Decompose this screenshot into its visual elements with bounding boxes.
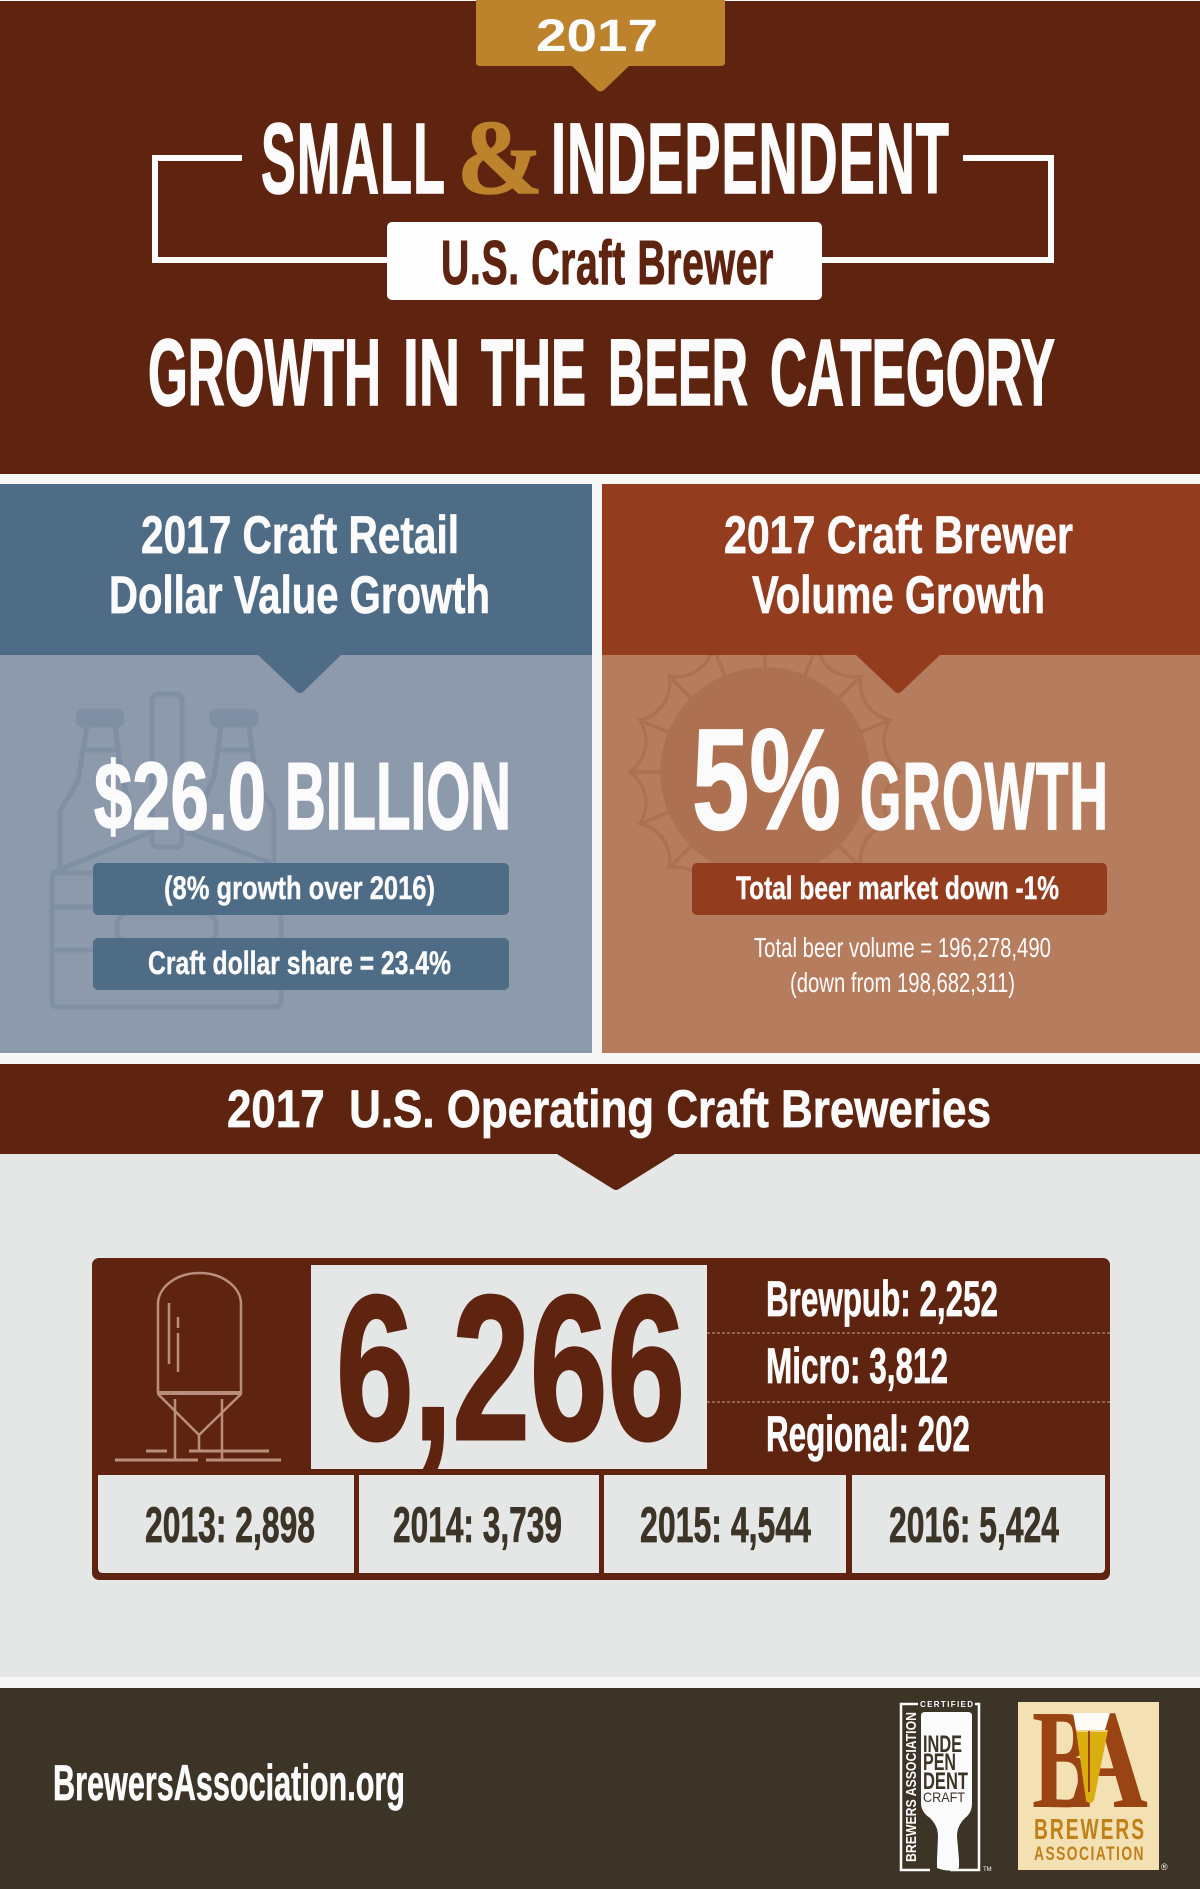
big figure: $26.0 billion [94,743,511,850]
panel header: Volume Growth [752,566,1045,625]
year: 2016 [852,1475,1105,1573]
callout: dollar share [93,938,509,990]
logo: brewers association: BREWERS [1034,1814,1146,1846]
title bracket [155,158,1051,260]
subtitle box: U.S. Craft Brewer [387,222,822,300]
logo: certified independent craft: BREWERS ASSOCIATION [903,1712,920,1862]
brewery type list: Micro: 3,812 [766,1338,948,1394]
logo: brewers association: ASSOCIATION [1034,1844,1145,1865]
callout: 8% growth [93,863,509,915]
logo: certified independent craft: INDE [923,1731,962,1758]
heading: growth in the beer category: THE [481,320,586,426]
big figure: 5% growth: 5% [692,699,841,860]
logo: certified independent craft: TM [983,1867,992,1873]
callout: dollar share: Craft dollar share = 23.4% [148,945,451,981]
panel header [0,484,592,693]
logo: brewers association: ® [1161,1862,1168,1872]
heading: growth in the beer category: IN [403,320,460,426]
big number: 6,266: 6,266 [336,1253,685,1483]
logo: certified independent craft: CERTIFIED [920,1700,973,1709]
logo: certified independent craft [901,1700,992,1873]
text: total beer volume: (down from 198,682,311) [790,967,1015,998]
big figure: $26.0 billion: BILLION [285,743,511,850]
year: 2015: 2015: 4,544 [640,1497,811,1553]
callout: total beer market [692,863,1107,915]
text: total beer volume: Total beer volume = 196,278,490 [754,932,1051,963]
year: 2013: 2013: 2,898 [145,1497,315,1553]
logo: certified independent craft: CRAFT [923,1789,965,1805]
panel header: 2017 Craft Brewer [724,506,1073,565]
brewery type list: Brewpub: 2,252 [766,1271,998,1327]
callout: 8% growth: (8% growth over 2016) [164,870,435,906]
panel header: Dollar Value Growth [109,566,490,625]
title: small and independent [261,99,950,216]
brewery type list: Regional: 202 [766,1406,970,1462]
year: 2013 [98,1475,354,1573]
footer panel [0,1680,1200,1889]
text: total beer volume [754,932,1051,998]
big figure: 5% growth [692,699,1109,860]
year: 2015 [604,1475,846,1573]
brewery type list [766,1271,998,1462]
icon: bottle cap [630,637,900,907]
title: small and independent: SMALL [261,103,446,215]
title: small and independent: & [457,99,543,216]
heading: growth in the beer category: GROWTH [148,320,381,426]
big figure: $26.0 billion: $26.0 [94,743,266,850]
heading: growth in the beer category: BEER [608,320,748,426]
header panel [0,0,1200,474]
callout: total beer market: Total beer market down -1% [736,870,1059,906]
panel header [602,484,1200,693]
section header: 2017 U.S. Operating Craft Breweries [227,1080,991,1139]
website url: BrewersAssociation.org [53,1755,405,1811]
icon: bottle carrier [52,694,281,1007]
year badge [476,0,725,92]
year: 2014 [359,1475,599,1573]
year badge: 2017 [536,10,658,61]
heading: growth in the beer category [148,320,1055,426]
icon: brewing tank [115,1273,281,1460]
year: 2016: 2016: 5,424 [889,1497,1059,1553]
logo: brewers association: A [1066,1680,1148,1838]
section header [0,1064,1200,1190]
logo: brewers association: B [1032,1680,1096,1838]
panel header: 2017 Craft Retail [141,506,459,565]
panel: craft brewer volume growth [602,484,1200,1053]
big number: 6,266 [311,1253,707,1483]
logo: brewers association [1018,1680,1168,1872]
panel: operating craft breweries [0,1064,1200,1677]
logo: certified independent craft: DENT [923,1768,968,1795]
panel: craft retail dollar value growth [0,484,592,1053]
logo: certified independent craft: PEN [923,1749,956,1776]
year: 2014: 2014: 3,739 [393,1497,562,1553]
subtitle box: U.S. Craft Brewer: U.S. Craft Brewer [441,229,774,298]
stats box [92,1253,1110,1580]
